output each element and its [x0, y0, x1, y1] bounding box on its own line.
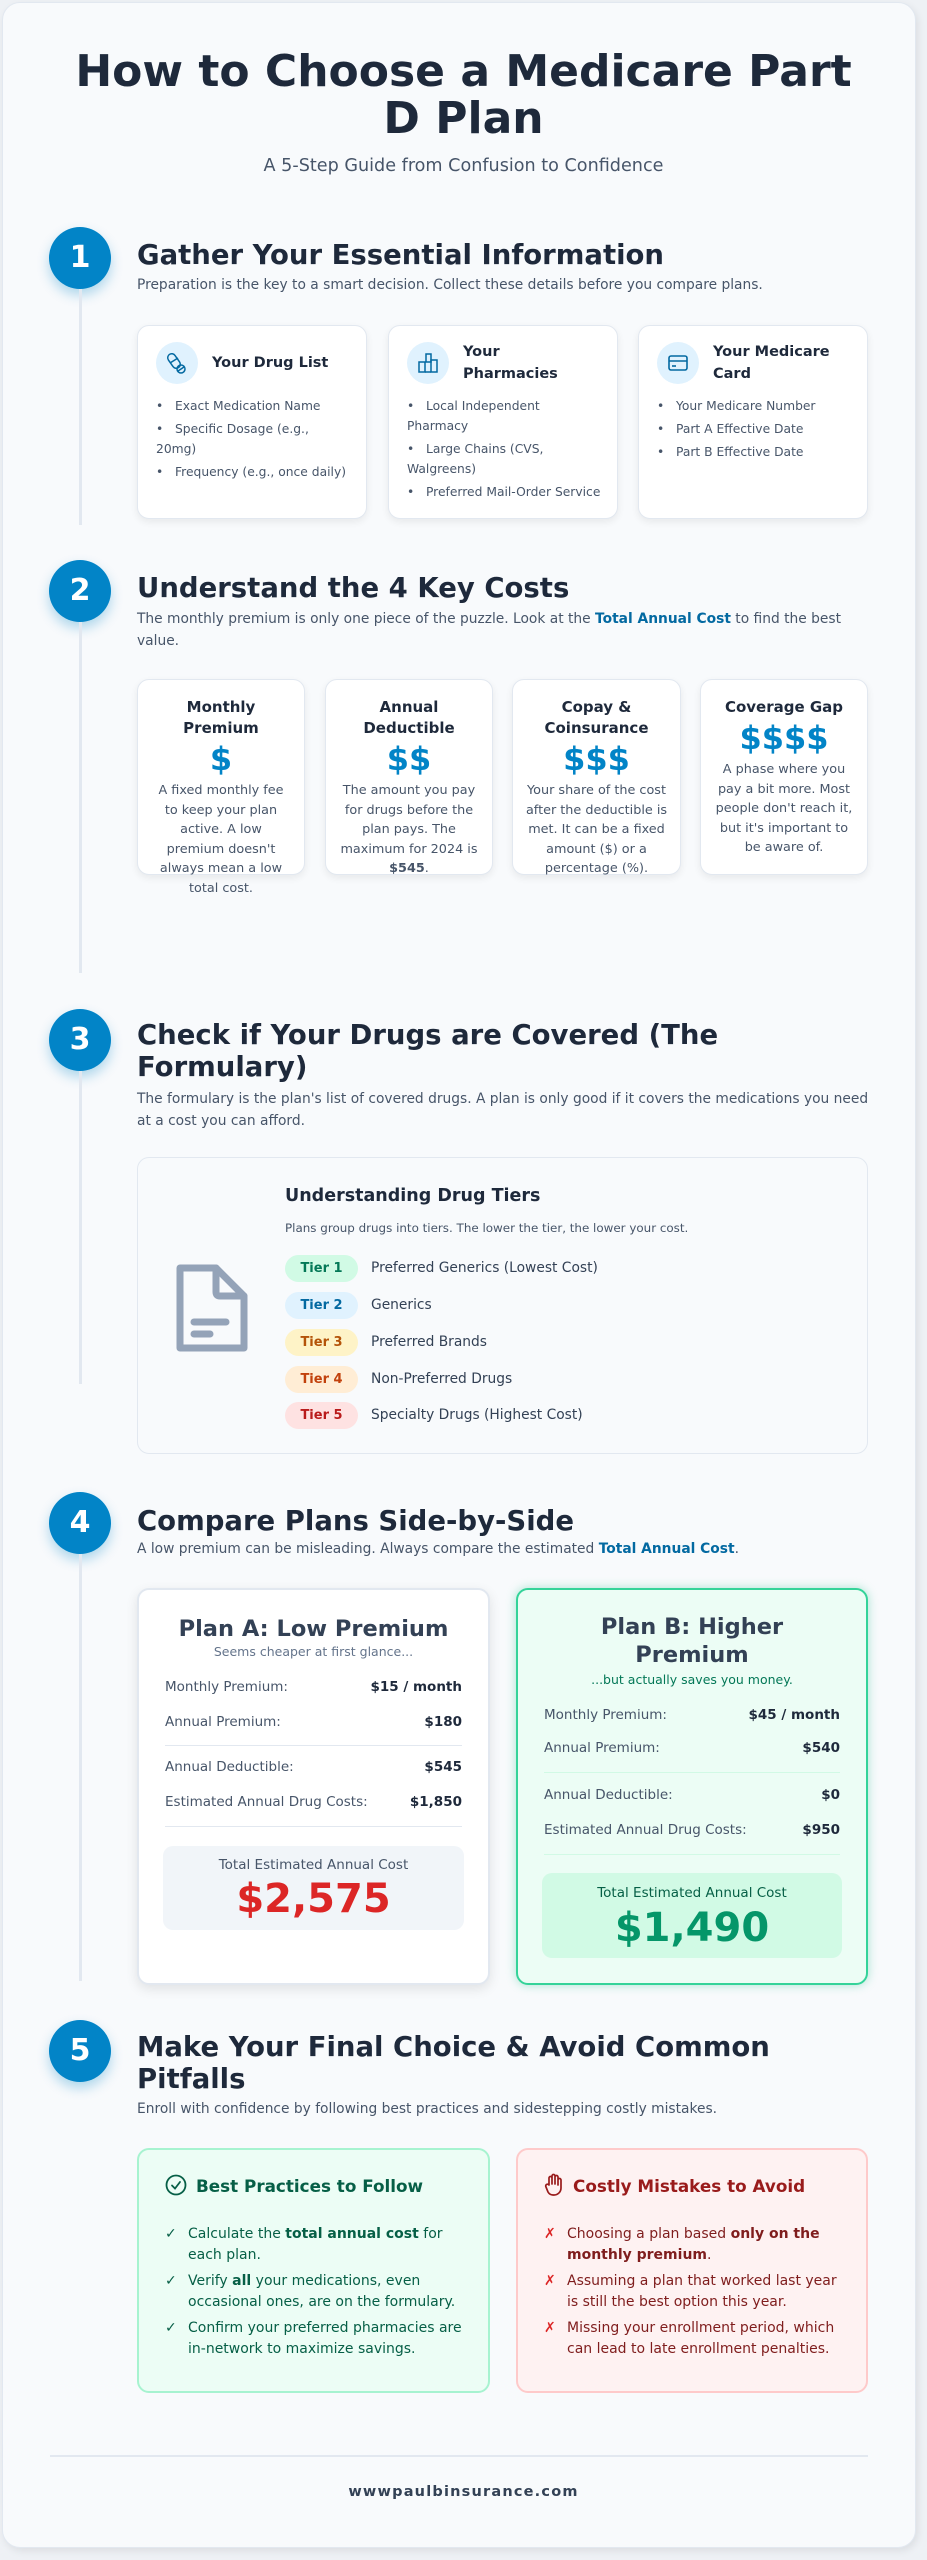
tier 3	[285, 1329, 358, 1356]
plan A total: Total Estimated Annual Cost	[219, 1857, 408, 1873]
step 2 description: The monthly premium is only one piece of the puzzle. Look at the Total Annual Cost to find the best value.	[137, 611, 841, 648]
plan B title: Premium	[635, 1642, 749, 1668]
list: • Specific Dosage (e.g.,	[156, 422, 309, 436]
plan B title	[601, 1614, 784, 1668]
plan B card: Annual Premium:	[544, 1740, 660, 1756]
plan B card: $540	[802, 1740, 840, 1756]
cost card: annual deductible: Deductible	[363, 719, 455, 737]
list	[657, 399, 816, 459]
panel: best practices: Verify all your medications, even occasional ones, are on the formulary.	[188, 2273, 455, 2310]
step 3 description: The formulary is the plan's list of covered drugs. A plan is only good if it covers the medications you need at a cost you can afford.	[137, 1091, 868, 1128]
tier 5	[285, 1402, 358, 1429]
heading: Best Practices to Follow	[196, 2176, 423, 2196]
title	[75, 46, 852, 144]
title: D Plan	[383, 93, 544, 144]
plan B total: Total Estimated Annual Cost	[597, 1885, 787, 1901]
list: • Your Medicare Number	[657, 399, 816, 413]
items: ✓	[165, 2226, 177, 2242]
plan B card	[516, 1588, 868, 1985]
card title	[462, 344, 558, 382]
items: ✗	[544, 2226, 556, 2242]
panel: costly mistakes	[516, 2148, 868, 2393]
cost card: coverage gap: $$$$	[739, 719, 829, 757]
tier 1: Tier 1	[300, 1261, 343, 1276]
plan B card: Estimated Annual Drug Costs:	[544, 1822, 747, 1838]
plan A card: Estimated Annual Drug Costs:	[165, 1794, 368, 1810]
panel: best practices: ✓	[165, 2320, 177, 2336]
cost card: copay: Copay &	[562, 698, 631, 716]
panel: best practices	[137, 2148, 490, 2393]
plan A title: Plan A: Low Premium	[179, 1616, 448, 1642]
panel: best practices: Confirm your preferred pharmacies are in-network to maximize savings.	[188, 2320, 462, 2357]
panel: costly mistakes: Missing your enrollment period, which can lead to late enrollment penalties.	[567, 2320, 834, 2357]
card title: Your Medicare	[713, 344, 830, 360]
tier 4	[285, 1366, 358, 1393]
plan A card: Annual Deductible:	[165, 1759, 294, 1775]
cost card: coverage gap: A phase where you pay a bit more. Most people don't reach it, but it's important to be aware of.	[716, 762, 852, 855]
step 4 description: A low premium can be misleading. Always compare the estimated Total Annual Cost.	[137, 1541, 739, 1557]
tier 2: Tier 2	[300, 1298, 343, 1313]
heading: Costly Mistakes to Avoid	[573, 2176, 805, 2196]
plan B card: $950	[802, 1822, 840, 1838]
card title: Your	[463, 344, 500, 360]
footer: wwwpaulbinsurance.com	[348, 2484, 579, 2500]
tier 4: Tier 4	[300, 1372, 343, 1387]
plan A card: $545	[424, 1759, 462, 1775]
step 1 heading: Gather Your Essential Information	[137, 239, 664, 271]
panel: costly mistakes: Assuming a plan that worked last year is still the best option this year.	[567, 2273, 837, 2310]
icon: hand	[544, 2174, 562, 2196]
step 3 badge	[49, 1009, 111, 1071]
cost card: monthly premium: $	[210, 740, 232, 778]
step 3 heading: Check if Your Drugs are Covered (The Formulary)	[137, 1019, 718, 1083]
step 3 badge: 3	[70, 1022, 90, 1057]
list: • Part B Effective Date	[657, 445, 803, 459]
cost card: monthly premium	[137, 679, 305, 875]
list: Pharmacy	[407, 419, 468, 433]
cost card: annual deductible	[325, 679, 493, 875]
panel: drug tiers	[137, 1157, 868, 1454]
icon: pills	[156, 342, 198, 384]
step 5 badge	[49, 2020, 111, 2082]
step 5 badge: 5	[70, 2033, 90, 2068]
plan A total: $2,575	[236, 1876, 391, 1922]
plan B total: $1,490	[615, 1905, 769, 1951]
plan A card: Annual Premium:	[165, 1714, 281, 1730]
list	[156, 399, 346, 479]
card title: Pharmacies	[463, 366, 558, 382]
plan B rows: $45 / month	[748, 1707, 840, 1723]
plan B card: $0	[821, 1787, 840, 1803]
step 5 heading: Make Your Final Choice & Avoid Common Pitfalls	[137, 2031, 770, 2095]
step 4 badge	[49, 1492, 111, 1554]
cost card: annual deductible: The amount you pay for drugs before the plan pays. The maximum for 2024 is $545.	[340, 783, 478, 876]
list: 20mg)	[156, 442, 196, 456]
cost card: copay	[512, 679, 681, 875]
icon: check circle	[166, 2174, 186, 2196]
card: pharmacies	[388, 325, 618, 519]
list: • Part A Effective Date	[657, 422, 803, 436]
tier 2	[285, 1292, 358, 1319]
card: medicare card	[638, 325, 868, 519]
card title: Your Drug List	[212, 355, 328, 371]
items: Choosing a plan based only on the monthly premium.	[567, 2226, 820, 2263]
items: Calculate the total annual cost for each plan.	[188, 2226, 443, 2263]
panel: drug tiers: Preferred Generics (Lowest Cost)	[371, 1260, 598, 1276]
card: drug list	[137, 325, 367, 519]
plan B card: Annual Deductible:	[544, 1787, 673, 1803]
step 5 description: Enroll with confidence by following best practices and sidestepping costly mistakes.	[137, 2101, 717, 2117]
tier 3: Tier 3	[300, 1335, 343, 1350]
step 2 badge: 2	[70, 573, 90, 608]
subtitle: A 5-Step Guide from Confusion to Confidence	[264, 156, 663, 176]
plan A card: $180	[424, 1714, 462, 1730]
panel: drug tiers: Generics	[371, 1297, 432, 1313]
list: Walgreens)	[407, 462, 476, 476]
step 1 badge	[49, 227, 111, 289]
panel: drug tiers: Specialty Drugs (Highest Cost)	[371, 1407, 583, 1423]
list: • Large Chains (CVS,	[407, 442, 543, 456]
panel: drug tiers: Non-Preferred Drugs	[371, 1371, 512, 1387]
icon: card	[657, 342, 699, 384]
plan B total	[542, 1873, 842, 1958]
card title: Card	[713, 366, 751, 382]
tier 1	[285, 1255, 358, 1282]
tiers subtitle: Plans group drugs into tiers. The lower the tier, the lower your cost.	[285, 1221, 688, 1235]
panel: costly mistakes: ✗	[544, 2320, 556, 2336]
step 2 heading: Understand the 4 Key Costs	[137, 572, 569, 604]
list	[407, 399, 600, 499]
tiers heading: Understanding Drug Tiers	[285, 1186, 540, 1206]
step 1 description: Preparation is the key to a smart decision. Collect these details before you compare plans.	[137, 277, 763, 293]
cost card: annual deductible: $$	[387, 740, 431, 778]
list: • Exact Medication Name	[156, 399, 320, 413]
plan A card: Seems cheaper at first glance...	[214, 1644, 413, 1659]
cost card: annual deductible: Annual	[380, 698, 438, 716]
plan A card	[137, 1588, 490, 1985]
title: How to Choose a Medicare Part	[75, 46, 852, 97]
icon: document	[176, 1264, 248, 1352]
plan A rows	[165, 1679, 462, 1695]
panel: drug tiers: Preferred Brands	[371, 1334, 487, 1350]
list: • Preferred Mail-Order Service	[407, 485, 600, 499]
plan A total	[163, 1846, 464, 1930]
plan A rows: Monthly Premium:	[165, 1679, 288, 1695]
cost card: monthly premium: Premium	[183, 719, 259, 737]
step 4 heading: Compare Plans Side-by-Side	[137, 1505, 574, 1537]
plan B title: Plan B: Higher	[601, 1614, 783, 1640]
step 2 badge	[49, 560, 111, 622]
cost card: monthly premium: Monthly	[187, 698, 255, 716]
plan A rows: $15 / month	[370, 1679, 462, 1695]
cost card: copay: Your share of the cost after the deductible is met. It can be a fixed amount ($) or a percentage (%).	[526, 783, 667, 876]
plan B rows: Monthly Premium:	[544, 1707, 667, 1723]
cost card: copay: $$$	[563, 740, 630, 778]
plan A card: $1,850	[410, 1794, 462, 1810]
cost card: coverage gap	[700, 679, 868, 875]
plan B card: ...but actually saves you money.	[591, 1672, 793, 1687]
plan B rows	[544, 1707, 840, 1723]
cost card: monthly premium: A fixed monthly fee to keep your plan active. A low premium doesn't always mean a low total cost.	[158, 783, 284, 896]
cost card: coverage gap: Coverage Gap	[725, 698, 843, 716]
panel: best practices: ✓	[165, 2273, 177, 2289]
list: • Local Independent	[407, 399, 540, 413]
cost card: copay: Coinsurance	[544, 719, 648, 737]
list: • Frequency (e.g., once daily)	[156, 465, 346, 479]
card title	[712, 344, 830, 382]
step 1 badge: 1	[70, 240, 90, 275]
panel: costly mistakes: ✗	[544, 2273, 556, 2289]
step 4 badge: 4	[70, 1505, 90, 1540]
icon: building	[407, 342, 449, 384]
tier 5: Tier 5	[300, 1408, 343, 1423]
